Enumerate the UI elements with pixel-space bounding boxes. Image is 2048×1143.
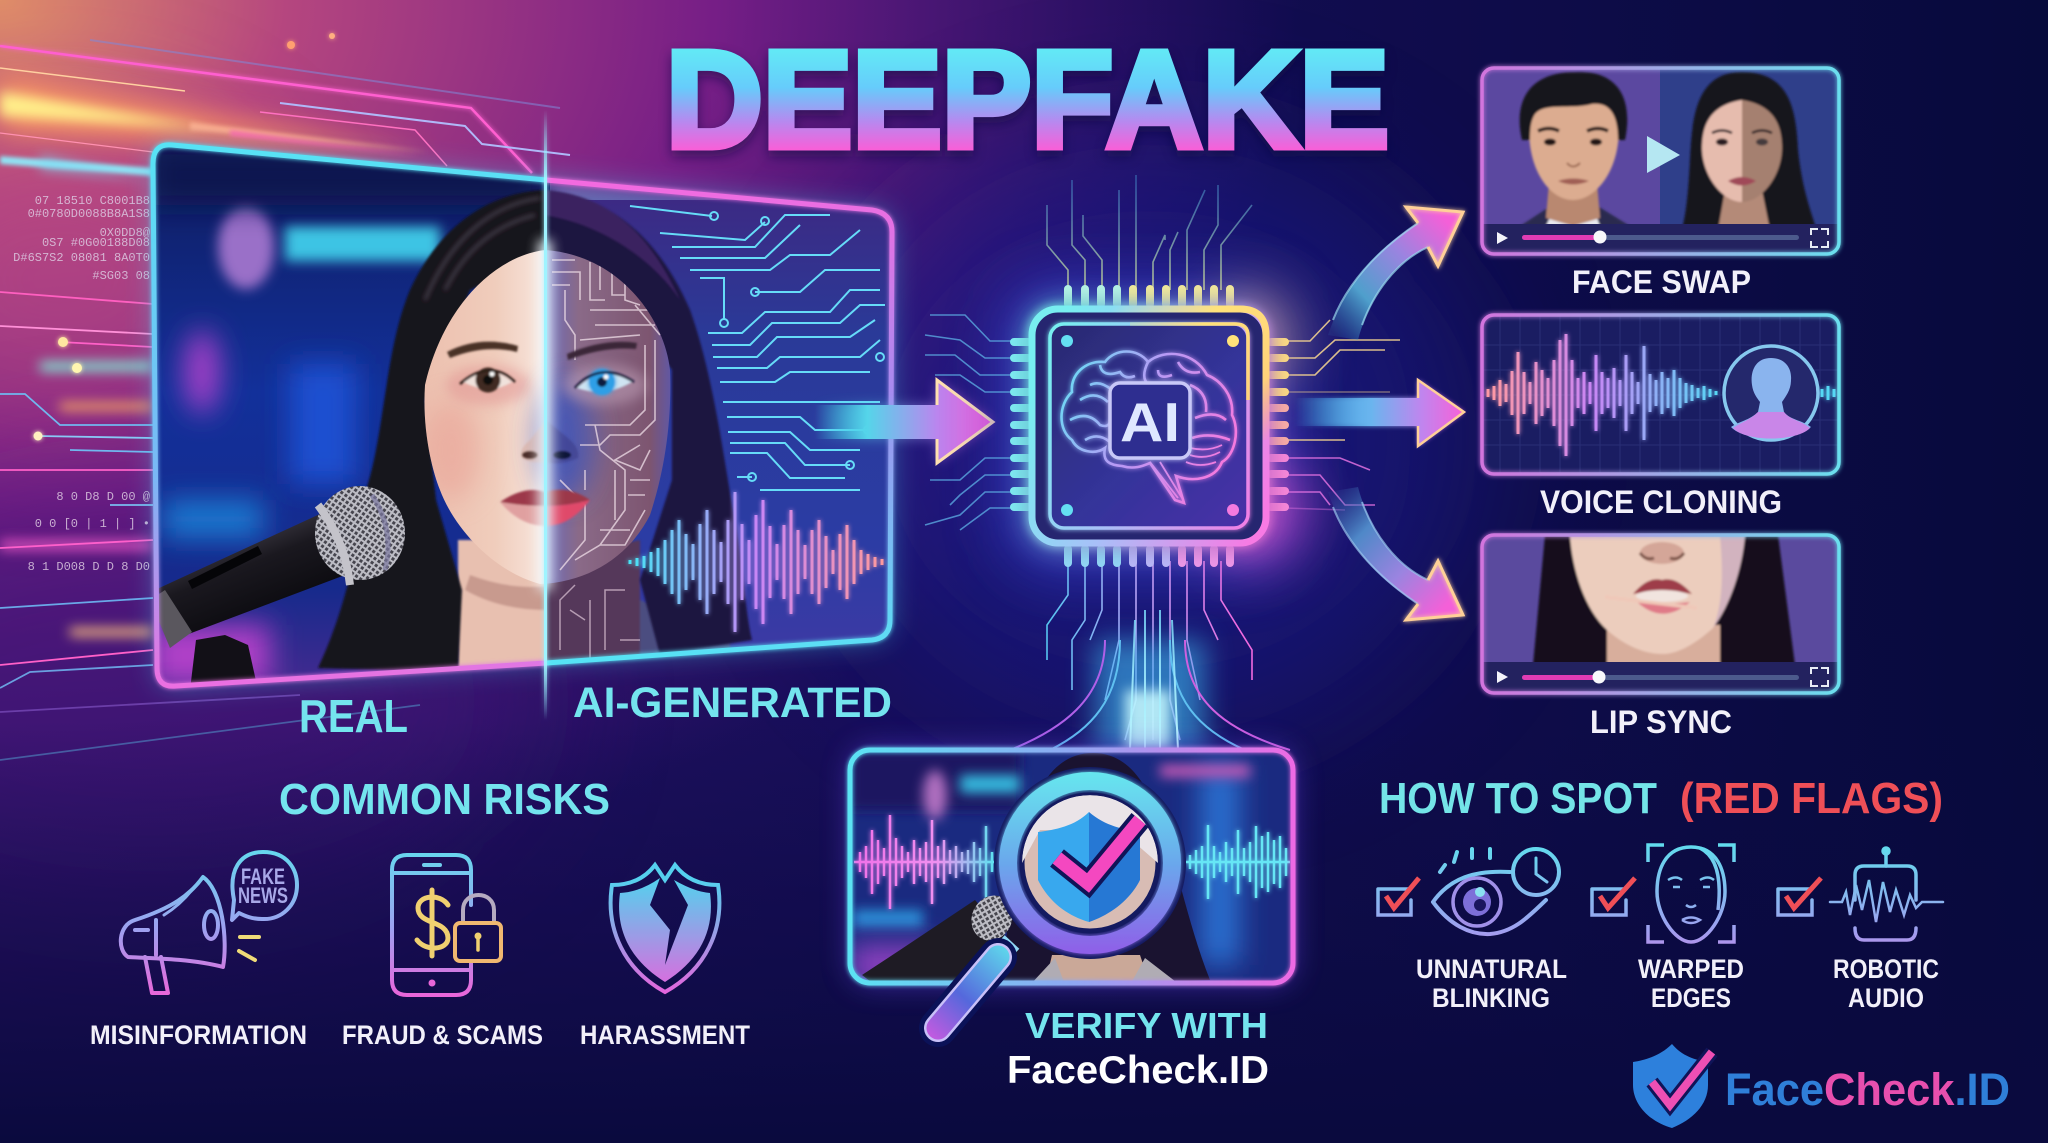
AI half of face	[538, 245, 676, 590]
icon: cloned voice avatar	[1724, 346, 1818, 440]
centre divider beam	[538, 240, 552, 590]
chip body	[1032, 309, 1266, 543]
red flag labels: AUDIO	[1848, 983, 1924, 1013]
neck and clothing	[458, 540, 730, 680]
risk labels: HARASSMENT	[580, 1020, 750, 1050]
red flag labels: EDGES	[1651, 983, 1731, 1013]
icon: robotic audio	[1778, 848, 1943, 940]
title: DEEPFAKE	[666, 23, 1389, 177]
panel: verify with magnifier	[850, 748, 1294, 985]
left light streaks and data lines	[0, 33, 570, 760]
AI badge	[1110, 383, 1190, 458]
AI chip	[925, 175, 1400, 755]
waveform right	[1186, 825, 1290, 899]
risk labels: FRAUD & SCAMS	[342, 1020, 543, 1050]
woman portrait	[1678, 72, 1820, 240]
icon: megaphone with fake news bubble	[121, 852, 297, 993]
play triangle	[1647, 136, 1680, 173]
heading: how to spot: (RED FLAGS)	[1680, 774, 1943, 823]
facial features	[447, 342, 637, 526]
heading: common risks: COMMON RISKS	[279, 775, 610, 824]
data stream into verify panel	[1010, 610, 1290, 755]
real half of face	[420, 245, 546, 590]
chip pins	[1014, 289, 1285, 563]
left light streaks and data lines: 0#0780D0088B8A1S8	[28, 207, 150, 221]
waveform	[630, 492, 882, 632]
left light streaks and data lines: 07 18510 C8001B8	[35, 194, 150, 208]
microphone	[150, 486, 405, 690]
hair	[318, 190, 752, 672]
panel: face swap	[1482, 68, 1840, 300]
bubble text: fake news: FAKE	[241, 864, 285, 889]
label: FaceCheck.ID: FaceCheck.ID	[1007, 1049, 1269, 1092]
panel: lip sync	[1482, 535, 1840, 740]
circuit traces around chip	[925, 175, 1400, 740]
left light streaks and data lines: 0 0 [0 | 1 | ] •	[35, 517, 150, 531]
mic in panel	[862, 889, 1020, 985]
red flag labels: UNNATURAL	[1416, 954, 1567, 984]
icon: magnifier with verified shield	[938, 767, 1186, 1028]
bubble text: fake news: NEWS	[238, 883, 288, 908]
left light streaks and data lines: 0X0DD8@	[100, 226, 150, 240]
left light streaks and data lines: 8 1 D008 D D 8 D0	[28, 560, 150, 574]
waveform left	[854, 815, 994, 909]
label: LIP SYNC: LIP SYNC	[1590, 704, 1732, 740]
blurred studio background	[150, 140, 896, 700]
icon: phone with dollar and lock	[392, 855, 501, 995]
video controls	[1482, 224, 1840, 256]
label: REAL: REAL	[299, 690, 408, 742]
red flag labels: BLINKING	[1432, 983, 1550, 1013]
red flag labels	[1416, 954, 1939, 1013]
red flag labels: WARPED	[1638, 954, 1744, 984]
waveform	[1488, 334, 1834, 456]
man portrait	[1520, 72, 1630, 226]
arrow: chip to lip sync	[1328, 487, 1463, 620]
icon: unnatural blinking	[1378, 849, 1559, 934]
heading: how to spot: HOW TO SPOT	[1379, 774, 1657, 823]
divider line	[544, 110, 547, 720]
logo: FaceCheck.ID	[1633, 1044, 2010, 1128]
arrow: face to chip	[815, 380, 993, 463]
frame border	[153, 145, 892, 686]
video controls	[1482, 662, 1840, 694]
label: AI-GENERATED: AI-GENERATED	[573, 679, 892, 727]
arrow: chip to face swap	[1328, 207, 1463, 340]
arrow: chip to voice cloning	[1295, 380, 1464, 446]
left light streaks and data lines: 8 0 D8 D 00 @	[56, 490, 150, 504]
heading: how to spot	[1379, 774, 1943, 823]
icon: brain	[1062, 352, 1236, 503]
panel: real vs AI-generated face	[150, 110, 896, 742]
left light streaks and data lines: 0S7 #0G00188D08	[42, 236, 150, 250]
label: verify with: VERIFY WITH	[1025, 1005, 1268, 1046]
left light streaks and data lines: D#6S7S2 08081 8A0T0	[13, 251, 150, 265]
title: DEEPFAKE	[666, 29, 1389, 183]
circuit lines on AI neck	[560, 585, 640, 660]
risk labels	[90, 1020, 750, 1050]
panel: voice cloning	[1482, 315, 1839, 520]
icon: warped edges	[1592, 845, 1734, 942]
risk labels: MISINFORMATION	[90, 1020, 307, 1050]
red flag labels: ROBOTIC	[1833, 954, 1939, 984]
AI badge: AI	[1120, 391, 1180, 453]
woman hair behind lens	[1000, 753, 1210, 985]
label: FACE SWAP: FACE SWAP	[1572, 264, 1751, 300]
logo: FaceCheck.ID: FaceCheck.ID	[1725, 1064, 2010, 1115]
circuit traces on AI side	[630, 206, 885, 490]
icon: cracked shield	[611, 865, 719, 992]
left light streaks and data lines: #SG03 08	[92, 269, 150, 283]
label: VOICE CLONING: VOICE CLONING	[1540, 484, 1782, 520]
bubble text: fake news	[238, 864, 288, 908]
